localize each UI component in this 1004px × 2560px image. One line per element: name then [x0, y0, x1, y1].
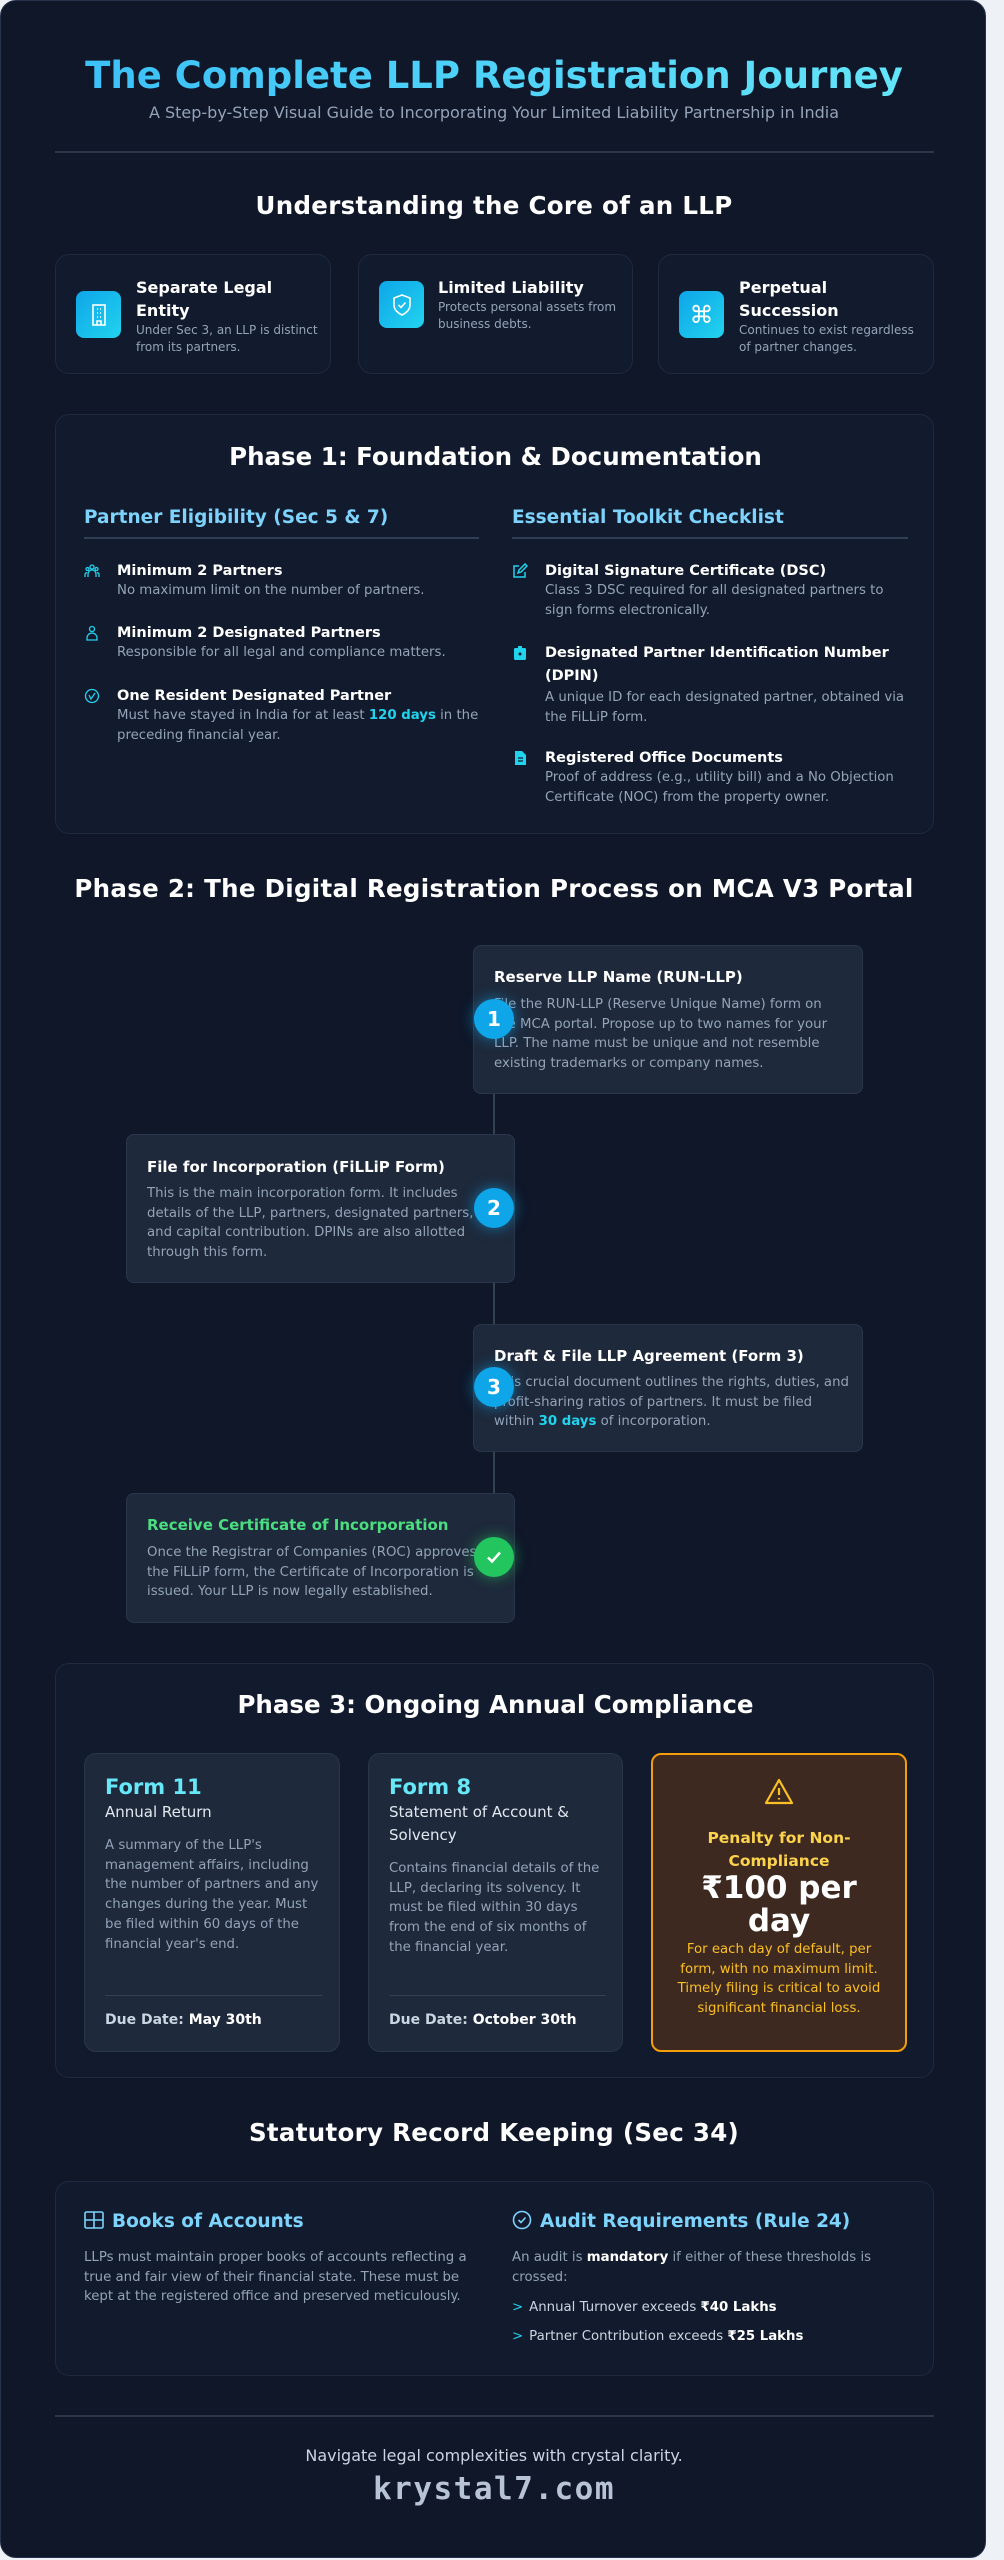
column: audit requirements: > Partner Contribution exceeds ₹25 Lakhs [512, 2329, 803, 2344]
step marker 3: 3 [487, 1375, 501, 1399]
text [739, 278, 914, 354]
item: min partners [84, 563, 425, 598]
item: DSC: Class 3 DSC required for all designated partners to sign forms electronically. [545, 583, 883, 618]
step 3: Draft & File LLP Agreement (Form 3) [494, 1347, 804, 1365]
column: audit requirements: Audit Requirements (Rule 24) [540, 2211, 850, 2232]
card: penalty: ₹100 per day [701, 1870, 857, 1939]
column: books of accounts [84, 2211, 467, 2304]
text [438, 278, 616, 331]
card: perpetual succession [658, 254, 934, 374]
text: Continues to exist regardless of partner changes. [739, 323, 914, 354]
card: form 11: Due Date: May 30th [105, 2012, 262, 2028]
text: Perpetual Succession [739, 278, 839, 320]
text: Protects personal assets from business debts. [438, 300, 616, 331]
item: designated partners [86, 625, 446, 660]
card: form 8: Due Date: October 30th [389, 2012, 577, 2028]
icon: command [679, 291, 724, 338]
card: form 8: Form 8 [389, 1775, 471, 1799]
text: Limited Liability [438, 278, 584, 297]
step marker 2 [474, 1188, 514, 1228]
item: designated partners: Responsible for all legal and compliance matters. [117, 645, 446, 660]
card: limited liability [358, 254, 633, 374]
text: Under Sec 3, an LLP is distinct from its partners. [136, 323, 318, 354]
subheading [512, 505, 908, 539]
heading: phase 1: Phase 1: Foundation & Documentation [229, 442, 762, 471]
step 3: This crucial document outlines the rights, duties, and profit-sharing ratios of partners. It must be filed within 30 days of incorporation. [494, 1375, 849, 1429]
item: DPIN: Designated Partner Identification Number (DPIN) [545, 645, 889, 684]
heading: core: Understanding the Core of an LLP [256, 191, 732, 220]
item: DSC [513, 563, 883, 618]
item: min partners: Minimum 2 Partners [117, 563, 282, 579]
icon: command: ⌘ [690, 300, 714, 328]
step 4: Once the Registrar of Companies (ROC) approves the FiLLiP form, the Certificate of Incorporation is issued. Your LLP is now legally established. [147, 1545, 476, 1599]
card: form 11: Annual Return [105, 1803, 212, 1821]
step 4 [126, 1493, 515, 1623]
step 3 [473, 1324, 863, 1452]
card: form 8 [368, 1753, 623, 2052]
subheading: Essential Toolkit Checklist [512, 507, 784, 528]
step marker: check [474, 1537, 514, 1577]
card: form 11: A summary of the LLP's management affairs, including the number of partners and any changes during the year. Must be filed within 60 days of the financial year's end. [105, 1838, 318, 1952]
column: audit requirements [512, 2210, 871, 2344]
subheading [84, 505, 479, 539]
step 1: Reserve LLP Name (RUN-LLP) [494, 968, 743, 986]
step marker 1 [474, 999, 514, 1039]
column: audit requirements: An audit is mandatory if either of these thresholds is crossed: [512, 2250, 871, 2285]
heading: phase 2: Phase 2: The Digital Registration Process on MCA V3 Portal [74, 874, 914, 903]
step 1: File the RUN-LLP (Reserve Unique Name) form on the MCA portal. Propose up to two names for your LLP. The name must be unique and not resemble existing trademarks or company names. [494, 997, 827, 1071]
step 2: This is the main incorporation form. It includes details of the LLP, partners, designated partners, and capital contribution. DPINs are also allotted through this form. [147, 1186, 473, 1260]
heading: record keeping: Statutory Record Keeping (Sec 34) [249, 2118, 739, 2147]
column: toolkit [512, 507, 908, 805]
item: DSC: Digital Signature Certificate (DSC) [545, 563, 826, 579]
step marker 1: 1 [487, 1007, 501, 1031]
icon: building [76, 291, 121, 338]
card: form 8: Statement of Account & Solvency [389, 1803, 569, 1844]
card: penalty: For each day of default, per form, with no maximum limit. Timely filing is critical to avoid significant financial loss. [678, 1942, 880, 2016]
step marker 2: 2 [487, 1196, 501, 1220]
heading: phase 3: Phase 3: Ongoing Annual Compliance [237, 1690, 754, 1719]
text: Separate Legal Entity [136, 278, 272, 320]
item: min partners: No maximum limit on the number of partners. [117, 583, 425, 598]
step 4: Receive Certificate of Incorporation [147, 1516, 448, 1534]
card: form 11: Form 11 [105, 1775, 202, 1799]
timeline line [493, 1001, 495, 1546]
item: designated partners: Minimum 2 Designated Partners [117, 625, 381, 641]
item: resident partner [84, 688, 478, 743]
subheading: Partner Eligibility (Sec 5 & 7) [84, 507, 388, 528]
subtitle: A Step-by-Step Visual Guide to Incorporating Your Limited Liability Partnership in India [149, 103, 839, 122]
item: DPIN [514, 645, 904, 725]
item: office docs: Registered Office Documents [545, 750, 783, 766]
item: office docs: Proof of address (e.g., utility bill) and a No Objection Certificate (NOC) from the property owner. [545, 770, 894, 805]
item: office docs [515, 750, 894, 805]
card: separate legal entity [55, 254, 331, 374]
step marker 3 [474, 1367, 514, 1407]
panel: core cards [55, 254, 934, 374]
text [136, 278, 318, 354]
icon: shield [379, 281, 424, 328]
panel: phase 3 [55, 1663, 934, 2078]
column: books of accounts: Books of Accounts [112, 2211, 304, 2232]
column: audit requirements: > Annual Turnover exceeds ₹40 Lakhs [512, 2300, 777, 2315]
title: The Complete LLP Registration Journey [85, 54, 903, 97]
column: books of accounts: LLPs must maintain proper books of accounts reflecting a true and fair view of their financial state. These must be kept at the registered office and preserved meticulously. [84, 2250, 467, 2304]
step 2 [126, 1134, 515, 1283]
card: penalty: Penalty for Non-Compliance [707, 1829, 851, 1870]
icon: warning [764, 1778, 794, 1804]
card: penalty [651, 1753, 907, 2052]
item: DPIN: A unique ID for each designated partner, obtained via the FiLLiP form. [545, 690, 904, 725]
panel: phase 1 [55, 414, 934, 834]
footer brand: krystal7.com [373, 2471, 615, 2507]
step 1 [473, 945, 863, 1094]
item: resident partner: Must have stayed in India for at least 120 days in the preceding financial year. [117, 708, 478, 743]
item: resident partner: One Resident Designated Partner [117, 688, 391, 704]
column: partner eligibility [84, 507, 479, 743]
panel: record keeping [55, 2181, 934, 2376]
card: form 11 [84, 1753, 340, 2052]
footer tagline: Navigate legal complexities with crystal clarity. [305, 2446, 683, 2465]
step 2: File for Incorporation (FiLLiP Form) [147, 1158, 445, 1176]
card: form 8: Contains financial details of the LLP, declaring its solvency. It must be filed within 30 days from the end of six months of the financial year. [389, 1861, 599, 1955]
